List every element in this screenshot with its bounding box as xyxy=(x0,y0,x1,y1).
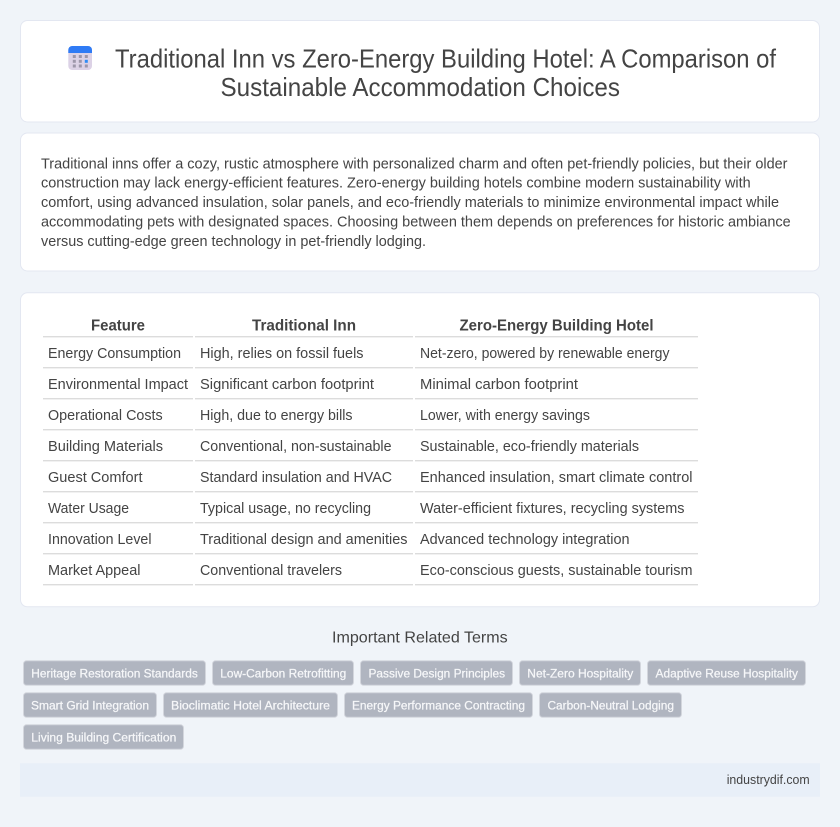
tag: Adaptive Reuse Hospitality: Adaptive Reuse Hospitality xyxy=(656,666,799,680)
tag: Living Building Certification: Living Building Certification xyxy=(31,730,176,744)
tag: Smart Grid Integration xyxy=(24,693,156,717)
title xyxy=(115,46,777,102)
tag: Low-Carbon Retrofitting xyxy=(212,661,354,685)
text block: introduction: construction may lack energy-efficient features. Zero-energy building hotels combine modern sustainability with xyxy=(41,176,751,192)
table row: environmental impact: Minimal carbon footprint xyxy=(420,377,578,393)
table row: guest comfort: Enhanced insulation, smart climate control xyxy=(420,470,692,486)
text block: introduction: versus cutting-edge green technology in pet-friendly lodging. xyxy=(41,234,426,250)
table row: innovation level: Traditional design and amenities xyxy=(200,532,408,548)
table row: operational costs: High, due to energy bills xyxy=(200,408,352,424)
tag: Carbon-Neutral Lodging xyxy=(540,693,682,717)
text block: introduction: comfort, using advanced insulation, solar panels, and eco-friendly materials to minimize environmental impact while xyxy=(41,195,779,211)
tag: Passive Design Principles xyxy=(360,661,512,685)
tag: Energy Performance Contracting xyxy=(344,693,532,717)
table row: innovation level: Innovation Level xyxy=(48,532,152,548)
title: Sustainable Accommodation Choices xyxy=(220,74,620,102)
table row: guest comfort: Standard insulation and HVAC xyxy=(200,470,392,486)
icon: calendar xyxy=(68,46,92,70)
table header: Feature xyxy=(91,318,145,335)
table header: Traditional Inn xyxy=(252,318,356,335)
table row: innovation level xyxy=(48,532,630,548)
tag: Bioclimatic Hotel Architecture: Bioclimatic Hotel Architecture xyxy=(171,698,330,712)
tag: Net-Zero Hospitality: Net-Zero Hospitality xyxy=(527,666,634,680)
table row: environmental impact: Significant carbon footprint xyxy=(200,377,374,393)
tag: Low-Carbon Retrofitting: Low-Carbon Retrofitting xyxy=(220,666,346,680)
text block: introduction xyxy=(41,156,791,250)
heading: important related terms: Important Related Terms xyxy=(332,630,508,647)
table row: energy consumption xyxy=(48,346,670,362)
table row: operational costs xyxy=(48,408,590,424)
table row: operational costs: Lower, with energy savings xyxy=(420,408,590,424)
table header xyxy=(91,318,654,335)
tag: Carbon-Neutral Lodging: Carbon-Neutral Lodging xyxy=(548,698,674,712)
table row: building materials xyxy=(48,439,639,455)
tag: Bioclimatic Hotel Architecture xyxy=(164,693,338,717)
table row: market appeal xyxy=(48,563,692,579)
table row: market appeal: Conventional travelers xyxy=(200,563,342,579)
panel: comparison table xyxy=(20,293,820,607)
table row: water usage: Water Usage xyxy=(48,501,129,517)
title: Traditional Inn vs Zero-Energy Building Hotel: A Comparison of xyxy=(115,46,777,74)
text block: introduction: accommodating pets with designated spaces. Choosing between them depends on preferences for historic ambiance xyxy=(41,214,791,230)
table row: market appeal: Eco-conscious guests, sustainable tourism xyxy=(420,563,692,579)
table row: guest comfort xyxy=(48,470,692,486)
tag: Heritage Restoration Standards xyxy=(24,661,206,685)
table row: environmental impact xyxy=(48,377,578,393)
tag: Smart Grid Integration: Smart Grid Integration xyxy=(31,698,149,712)
table row: water usage xyxy=(48,501,684,517)
related term tags xyxy=(24,661,806,749)
table row: building materials: Conventional, non-sustainable xyxy=(200,439,392,455)
table row: building materials: Building Materials xyxy=(48,439,163,455)
table row: building materials: Sustainable, eco-friendly materials xyxy=(420,439,639,455)
table row: guest comfort: Guest Comfort xyxy=(48,470,142,486)
footer xyxy=(20,763,820,797)
tag: Living Building Certification xyxy=(24,725,184,749)
tag: Heritage Restoration Standards: Heritage Restoration Standards xyxy=(31,666,198,680)
panel: introduction xyxy=(20,133,820,271)
tag: Energy Performance Contracting: Energy Performance Contracting xyxy=(352,698,525,712)
table row: energy consumption: High, relies on fossil fuels xyxy=(200,346,364,362)
table row: water usage: Water-efficient fixtures, recycling systems xyxy=(420,501,684,517)
table row: market appeal: Market Appeal xyxy=(48,563,140,579)
table row: innovation level: Advanced technology integration xyxy=(420,532,630,548)
tag: Adaptive Reuse Hospitality xyxy=(648,661,806,685)
table row: water usage: Typical usage, no recycling xyxy=(200,501,371,517)
table row: energy consumption: Net-zero, powered by renewable energy xyxy=(420,346,670,362)
tag: Passive Design Principles: Passive Design Principles xyxy=(368,666,505,680)
text block: introduction: Traditional inns offer a cozy, rustic atmosphere with personalized charm and often pet-friendly policies, but their older xyxy=(41,156,788,172)
table row: energy consumption: Energy Consumption xyxy=(48,346,181,362)
panel: title header xyxy=(20,20,820,122)
table row: environmental impact: Environmental Impact xyxy=(48,377,188,393)
table header: Zero-Energy Building Hotel xyxy=(460,318,654,335)
table row: operational costs: Operational Costs xyxy=(48,408,163,424)
tag: Net-Zero Hospitality xyxy=(520,661,640,685)
footer: industrydif.com xyxy=(727,772,810,787)
